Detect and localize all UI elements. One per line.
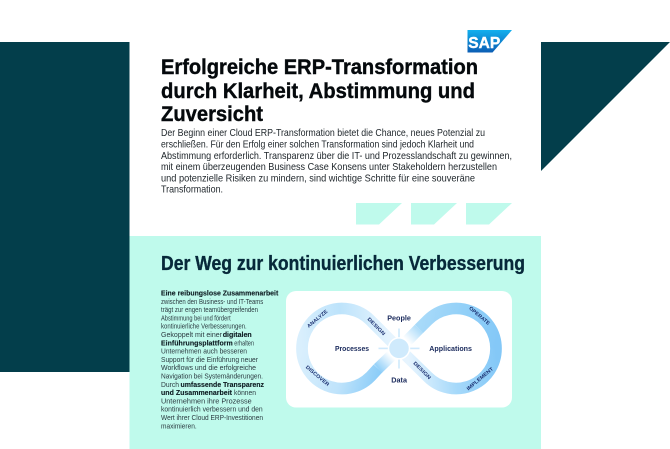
text block: improvement description: Navigation bei Systemänderungen. (161, 372, 263, 380)
text block: improvement description: kontinuierlich verbessern und den (161, 405, 263, 414)
logo: SAP: SAP (468, 35, 501, 52)
loop phase labels: OPERATE (467, 306, 491, 327)
loop phase labels: ANALYZE (306, 308, 330, 330)
panel: mint section (130, 236, 541, 449)
intro text block: erschließen. Für den Erfolg einer solchen Transformation sind jedoch Klarheit und (161, 140, 474, 150)
title (161, 56, 478, 126)
intro text block: und potenzielle Risiken zu mindern, sind wichtige Schritte für eine souveräne (161, 174, 475, 184)
diagram labels: Applications (429, 344, 472, 353)
text block: improvement description: Unternehmen auch besseren (161, 347, 247, 356)
text block: improvement description: Workflows und die erfolgreiche (161, 363, 256, 372)
text block: improvement description: zwischen den Business- und IT-Teams (161, 297, 264, 306)
text block: improvement description: Gekoppelt mit einer (161, 330, 223, 339)
text block: improvement description: und Zusammenarbeit (161, 388, 233, 397)
diagram labels (335, 314, 472, 384)
intro text block: Transformation. (161, 184, 223, 196)
loop phase labels (304, 306, 495, 392)
logo: SAP (468, 30, 512, 52)
decorative mint parallelograms (356, 203, 512, 224)
text block: improvement description: Abstimmung bei und fördert (161, 313, 231, 322)
panel: dark left block (0, 42, 130, 372)
text block: improvement description: Eine reibungslose Zusammenarbeit (161, 288, 279, 298)
text block: improvement description: umfassende Transparenz (180, 380, 264, 389)
centre hub with rays (378, 328, 420, 368)
intro text block: Abstimmung erforderlich. Transparenz über die IT- und Prozesslandschaft zu gewinnen, (161, 151, 512, 162)
text block: improvement description (161, 288, 279, 430)
text block: improvement description: kontinuierliche Verbesserungen. (161, 322, 247, 331)
title: durch Klarheit, Abstimmung und (161, 80, 475, 103)
text block: improvement description: Einführungsplattform (161, 338, 233, 347)
diagram labels: People (387, 314, 411, 322)
title: Erfolgreiche ERP-Transformation (161, 56, 478, 79)
text block: improvement description: Durch (161, 380, 179, 389)
loop phase labels: DESIGN (412, 361, 432, 381)
text block: improvement description: erhalten (234, 338, 254, 347)
loop phase labels: IMPLEMENT (466, 366, 495, 392)
diagram labels: Data (391, 376, 408, 384)
loop phase labels: DESIGN (366, 317, 386, 337)
intro text block: Der Beginn einer Cloud ERP-Transformation bietet die Chance, neues Potenzial zu (161, 128, 485, 139)
loop phase labels: DISCOVER (304, 365, 331, 388)
intro text block: mit einem überzeugenden Business Case Konsens unter Stakeholdern herzustellen (161, 162, 497, 173)
panel: infinity diagram card (286, 291, 512, 408)
infinity loop (302, 308, 496, 389)
title: Zuversicht (161, 103, 263, 126)
text block: improvement description: Support für die Einführung neuer (161, 355, 259, 364)
text block: improvement description: maximieren. (161, 421, 197, 430)
text block: improvement description: trägt zur engen teamübergreifenden (161, 305, 258, 314)
intro text block (161, 128, 512, 196)
text block: improvement description: können (234, 388, 256, 397)
text block: improvement description: Unternehmen ihre Prozesse (161, 396, 252, 405)
text block: improvement description: digitalen (223, 330, 252, 339)
diagram labels: Processes (335, 344, 369, 353)
text block: improvement description: Wert ihrer Cloud ERP-Investitionen (161, 413, 263, 422)
panel: dark triangle top right (541, 42, 670, 171)
section heading: Der Weg zur kontinuierlichen Verbesserung (161, 253, 525, 275)
